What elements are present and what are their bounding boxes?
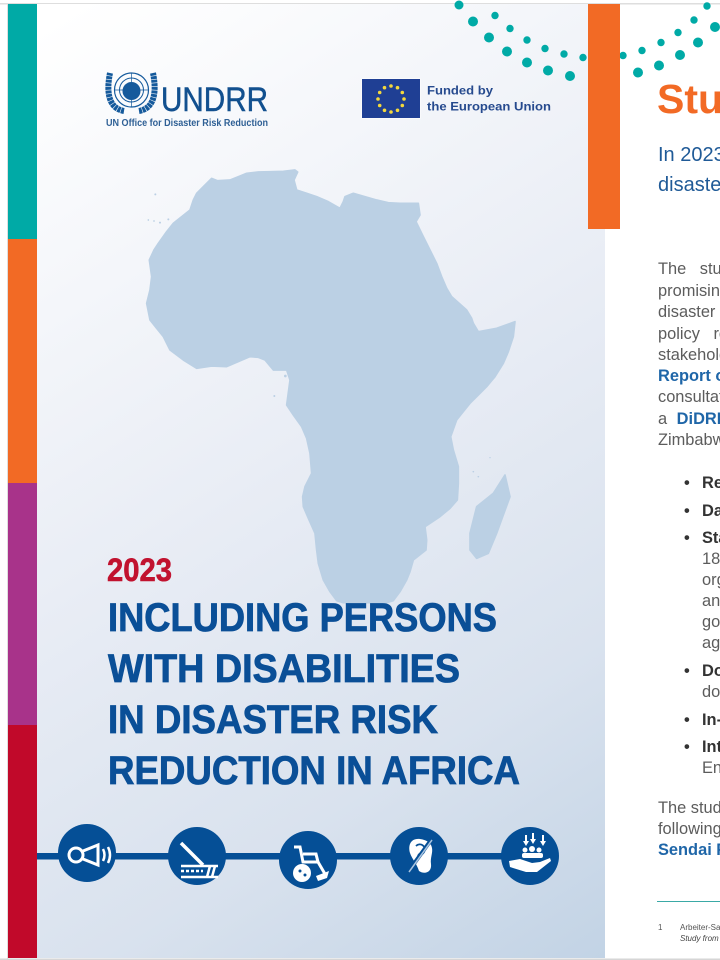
text block: study description bbox=[658, 260, 720, 449]
list: study methods: • bbox=[684, 662, 690, 680]
list: study methods: 18 bbox=[702, 550, 720, 568]
map: Africa silhouette bbox=[147, 170, 515, 603]
icon: white cane on tactile path bbox=[168, 827, 226, 885]
list: study methods: • bbox=[684, 502, 690, 520]
icon: hearing alarm bbox=[58, 824, 116, 882]
funding text: the European Union bbox=[427, 100, 551, 114]
funding text: Funded by bbox=[427, 84, 493, 98]
tagline: UN Office for Disaster Risk Reduction bbox=[106, 117, 268, 129]
icon: UN emblem bbox=[108, 73, 155, 111]
text block: study description: disaster bbox=[658, 303, 716, 321]
list: study methods: • bbox=[684, 529, 690, 547]
icon: EU flag bbox=[362, 78, 420, 118]
wordmark: UNDRR bbox=[161, 81, 268, 119]
title bbox=[108, 596, 520, 793]
icon: hand holding people bbox=[501, 827, 559, 885]
title: IN DISASTER RISK bbox=[108, 698, 438, 742]
colour stripe: left edge bbox=[8, 4, 37, 958]
orange tab bbox=[588, 4, 620, 229]
icon: wheelchair bbox=[279, 831, 337, 889]
icon row: disability types bbox=[37, 824, 559, 889]
list: study methods bbox=[684, 474, 720, 777]
logo: UNDRR bbox=[106, 73, 268, 129]
title: WITH DISABILITIES bbox=[108, 647, 460, 691]
decoration: teal dot arcs bbox=[454, 0, 720, 81]
year: 2023 bbox=[107, 552, 172, 588]
footnote bbox=[657, 901, 720, 943]
footnote: 1 bbox=[658, 923, 663, 932]
panel: cover page background bbox=[37, 4, 605, 958]
text block: closing paragraph bbox=[658, 799, 720, 859]
logo: funded by the European Union bbox=[362, 78, 551, 118]
footnote: Study from bbox=[680, 934, 719, 943]
title: REDUCTION IN AFRICA bbox=[108, 749, 520, 793]
list: study methods: • bbox=[684, 738, 690, 756]
text block: closing paragraph: following bbox=[658, 820, 720, 838]
list: study methods: • bbox=[684, 474, 690, 492]
title: INCLUDING PERSONS bbox=[108, 596, 497, 640]
list: study methods: • bbox=[684, 711, 690, 729]
icon: crossed-out ear bbox=[390, 827, 448, 885]
